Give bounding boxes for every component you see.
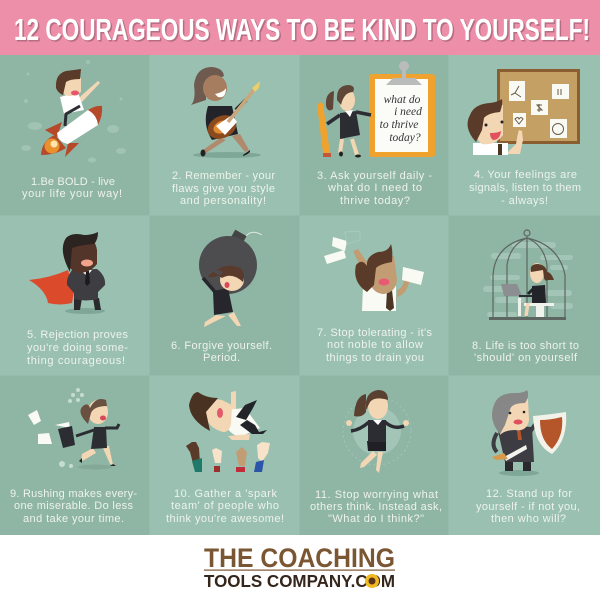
- icon: superhero businessman: [29, 232, 105, 314]
- caption 10: [166, 488, 284, 525]
- icon: man with sword and shield: [492, 390, 566, 476]
- caption 7: [317, 327, 432, 364]
- caption 7: things to drain you: [326, 352, 424, 364]
- caption 2: [172, 170, 275, 207]
- icon: woman in a birdcage: [483, 230, 573, 320]
- caption 5: [27, 329, 128, 367]
- caption 6: 6. Forgive yourself.: [171, 340, 272, 352]
- caption 7: 7. Stop tolerating - it's: [317, 327, 432, 339]
- logo: The Coaching Tools Company: [204, 543, 395, 591]
- panel 12: stand up: [449, 376, 600, 535]
- caption 2: flaws give you style: [172, 183, 275, 195]
- title banner: [0, 0, 600, 55]
- logo: The Coaching Tools Company: THE COACHING: [204, 543, 395, 573]
- caption 12: 12. Stand up for: [486, 488, 572, 500]
- icon: guitarist: [191, 67, 261, 158]
- caption 12: [476, 488, 580, 525]
- panel 10: spark team: [150, 376, 299, 535]
- icon: man at cork board: [468, 69, 580, 155]
- caption 3: thrive today?: [340, 195, 410, 207]
- caption 12: yourself - if not you,: [476, 501, 580, 513]
- caption 6: [171, 340, 272, 364]
- caption 2: and personality!: [180, 195, 266, 207]
- caption 1: your life your way!: [22, 188, 122, 200]
- caption 6: Period.: [203, 352, 240, 364]
- caption 4: signals, listen to them: [469, 182, 581, 194]
- caption 9: one miserable. Do less: [14, 500, 134, 512]
- handwriting: today?: [389, 132, 421, 144]
- panel 6: forgive: [150, 216, 299, 375]
- caption 1: 1.Be BOLD - live: [31, 176, 115, 188]
- caption 3: [317, 170, 432, 207]
- panel 5: rejection: [0, 216, 149, 375]
- caption 8: 8. Life is too short to: [472, 340, 579, 352]
- caption 8: 'should' on yourself: [474, 352, 578, 364]
- icon: woman with clipboard: [317, 61, 435, 158]
- caption 10: team' of people who: [171, 500, 279, 512]
- handwriting: what do: [384, 94, 421, 106]
- icon: rocket rider: [21, 60, 126, 162]
- caption 5: thing courageous!: [27, 355, 125, 367]
- caption 9: and take your time.: [23, 513, 124, 525]
- icon: woman carrying a bomb: [199, 230, 262, 327]
- caption 9: [10, 488, 137, 525]
- caption 3: what do I need to: [327, 182, 422, 194]
- caption 11: 11. Stop worrying what: [315, 489, 438, 501]
- caption 12: then who will?: [491, 513, 566, 525]
- panel 7: stop tolerating: [300, 216, 448, 375]
- caption 1: [22, 176, 122, 200]
- icon: crowd-surfing man: [186, 391, 270, 472]
- caption 8: [472, 340, 579, 364]
- panel 9: rushing: [0, 376, 149, 535]
- caption 5: you're doing some-: [27, 342, 128, 354]
- caption 3: 3. Ask yourself daily -: [317, 170, 432, 182]
- caption 11: "What do I think?": [328, 513, 424, 525]
- handwriting: i need: [394, 106, 422, 118]
- panel 8: life is short: [449, 216, 600, 375]
- panel 2: remember: [150, 55, 299, 215]
- caption 4: 4. Your feelings are: [474, 169, 577, 181]
- icon: sunflower: [365, 574, 379, 588]
- caption 11: others think. Instead ask,: [310, 501, 442, 513]
- caption 5: 5. Rejection proves: [27, 329, 128, 341]
- caption 2: 2. Remember - your: [172, 170, 275, 182]
- caption 4: - always!: [501, 195, 548, 207]
- icon: rushing woman: [28, 388, 119, 470]
- caption 7: not noble to allow: [327, 339, 423, 351]
- logo: The Coaching Tools Company: TOOLS COMPANY.COM: [204, 571, 395, 591]
- panel 11: stop worrying: [300, 376, 448, 535]
- caption 4: [469, 169, 581, 207]
- panel 1: be bold: [0, 55, 149, 215]
- icon: calm woman: [343, 390, 411, 473]
- handwriting: to thrive: [380, 119, 418, 131]
- caption 11: [310, 489, 442, 525]
- icon: man with papers: [324, 231, 424, 311]
- caption 10: think you're awesome!: [166, 513, 284, 525]
- caption 10: 10. Gather a 'spark: [174, 488, 278, 500]
- handwriting: [380, 94, 422, 144]
- panel 4: feelings: [449, 55, 600, 215]
- caption 9: 9. Rushing makes every-: [10, 488, 137, 500]
- panel 3: ask yourself: [300, 55, 448, 215]
